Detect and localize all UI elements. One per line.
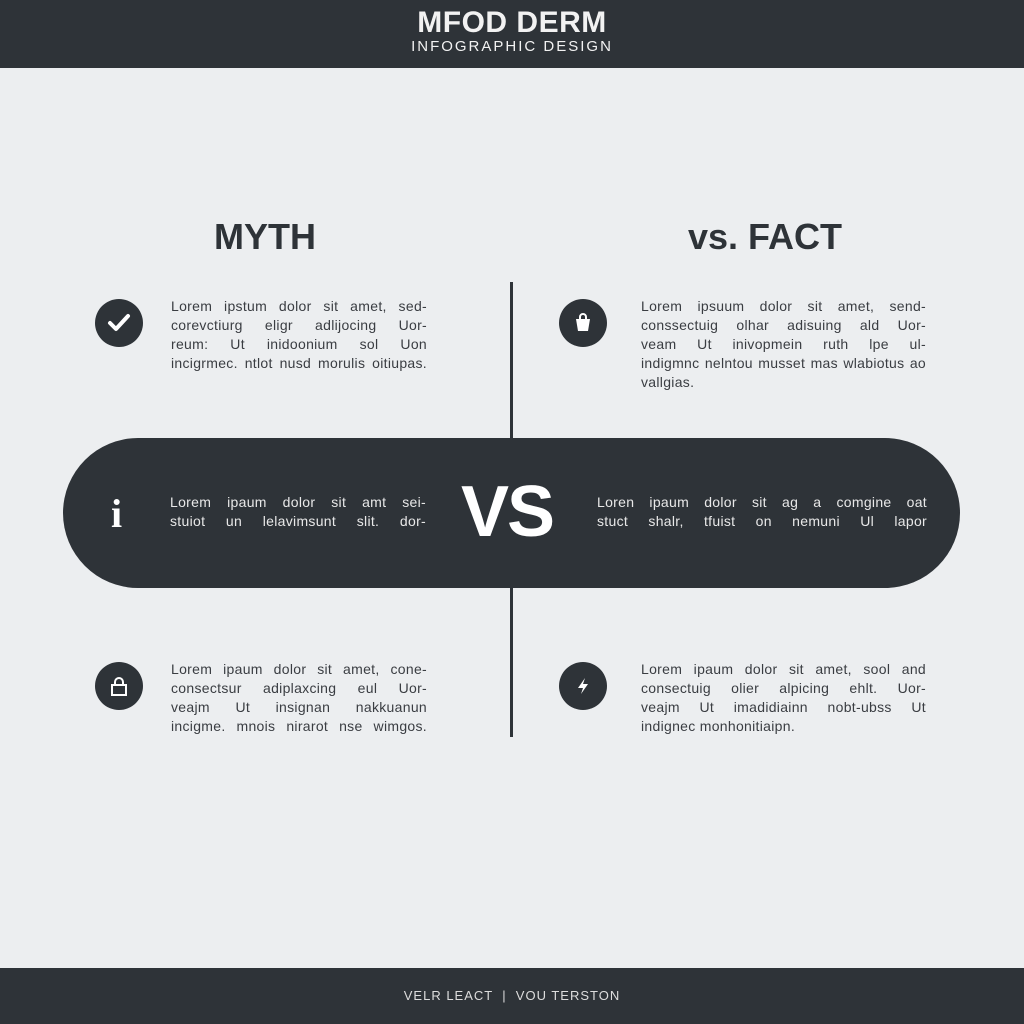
- heading: fact: vs. FACT: [688, 216, 842, 257]
- VS label: VS: [461, 472, 553, 552]
- text: myth 2: Lorem ipaum dolor sit amet, cone-: [171, 661, 427, 677]
- heading: myth: MYTH: [214, 216, 316, 257]
- text: fact 2: veajm Ut imadidiainn nobt-ubss Ut: [641, 699, 926, 715]
- text: band left: Lorem ipaum dolor sit amt sei-: [170, 494, 426, 510]
- text: myth 1: [171, 298, 427, 371]
- icon: bolt: [559, 662, 607, 710]
- text: myth 2: [171, 661, 427, 734]
- text: band right: stuct shalr, tfuist on nemuni Ul lapor: [597, 513, 927, 529]
- text: myth 2: consectsur adiplaxcing eul Uor-: [171, 680, 427, 696]
- icon: bag: [559, 299, 607, 347]
- text: myth 1: reum: Ut inidoonium sol Uon: [171, 336, 427, 352]
- text: fact 2: indignec monhonitiaipn.: [641, 718, 795, 734]
- footer text: VELR LEACT | VOU TERSTON: [404, 988, 620, 1003]
- text: band left: stuiot un lelavimsunt slit. dor-: [170, 513, 426, 529]
- text: fact 2: Lorem ipaum dolor sit amet, sool and: [641, 661, 926, 677]
- text: myth 2: veajm Ut insignan nakkuanun: [171, 699, 427, 715]
- text: band right: [597, 494, 927, 529]
- footer bar: [0, 968, 1024, 1024]
- text: fact 2: [641, 661, 926, 734]
- subtitle: INFOGRAPHIC DESIGN: [411, 38, 613, 55]
- icon: check: [95, 299, 143, 347]
- text: band right: Loren ipaum dolor sit ag a comgine oat: [597, 494, 927, 510]
- text: myth 2: incigme. mnois nirarot nse wimgos.: [171, 718, 427, 734]
- divider line top: [510, 282, 513, 442]
- title: MFOD DERM: [417, 6, 607, 39]
- icon: lock: [95, 662, 143, 710]
- text: fact 1: conssectuig olhar adisuing ald Uor-: [641, 317, 926, 333]
- icon: info: i: [111, 491, 122, 536]
- text: fact 1: indigmnc nelntou musset mas wlabiotus ao: [641, 355, 926, 371]
- text: fact 1: Lorem ipsuum dolor sit amet, send-: [641, 298, 926, 314]
- text: fact 1: veam Ut inivopmein ruth lpe ul-: [641, 336, 926, 352]
- text: myth 1: corevctiurg eligr adlijocing Uor-: [171, 317, 427, 333]
- divider line bottom: [510, 585, 513, 737]
- text: myth 1: incigrmec. ntlot nusd morulis oitiupas.: [171, 355, 427, 371]
- text: fact 1: [641, 298, 926, 390]
- text: myth 1: Lorem ipstum dolor sit amet, sed-: [171, 298, 427, 314]
- text: fact 1: vallgias.: [641, 374, 694, 390]
- header bar: [0, 0, 1024, 68]
- text: band left: [170, 494, 426, 529]
- text: fact 2: consectuig olier alpicing ehlt. Uor-: [641, 680, 926, 696]
- vs band: [63, 438, 960, 588]
